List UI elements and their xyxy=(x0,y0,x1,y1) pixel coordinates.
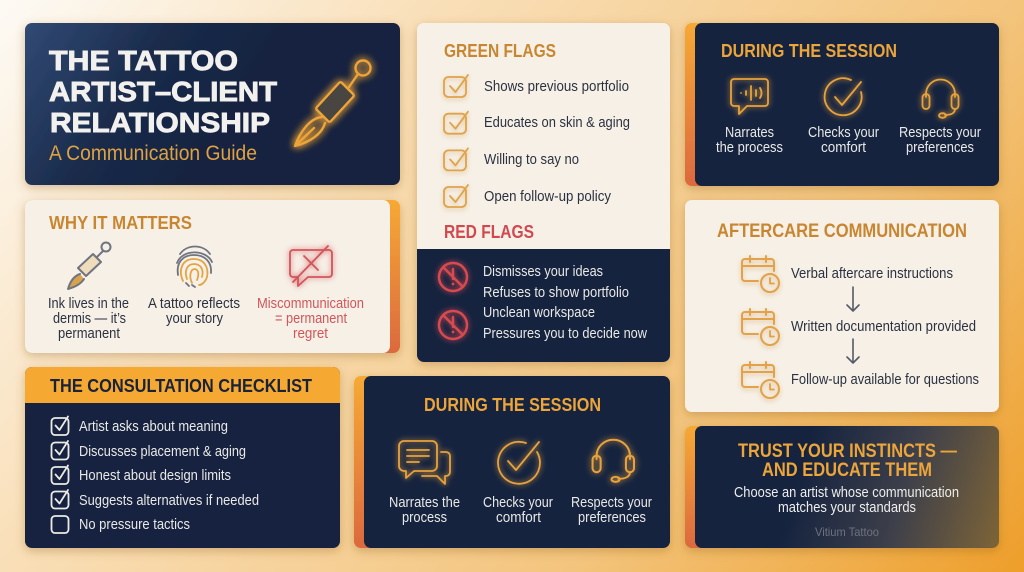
text: narrates xyxy=(389,494,460,526)
heading: WHY IT MATTERS xyxy=(49,213,192,233)
text: respects preferences xyxy=(899,124,981,156)
text: body xyxy=(734,484,959,516)
red flags dark area xyxy=(417,249,670,362)
panel: during the session (upper) xyxy=(685,23,999,186)
text: narrates: process xyxy=(402,509,447,526)
aftercare steps xyxy=(791,265,979,388)
subtitle: A Communication Guide xyxy=(49,142,257,165)
arrow: step one to two xyxy=(847,287,859,311)
aftercare steps: Verbal aftercare instructions xyxy=(791,265,953,282)
checklist items: Discusses placement & aging xyxy=(79,443,246,460)
green flag items: Open follow-up policy xyxy=(484,188,611,205)
arrow: step two to three xyxy=(847,339,859,363)
icon: miscommunication bubble xyxy=(290,246,332,286)
heading xyxy=(738,441,957,481)
heading: THE CONSULTATION CHECKLIST xyxy=(50,376,312,396)
icon: fingerprint xyxy=(177,246,212,287)
aftercare steps: Follow-up available for questions xyxy=(791,371,979,388)
text: respects preferences xyxy=(571,494,652,526)
text: respects preferences: preferences xyxy=(578,509,646,526)
aftercare steps: Written documentation provided xyxy=(791,318,976,335)
icon: check circle xyxy=(825,78,862,115)
text: reflects story: your story xyxy=(166,310,223,327)
panel: during the session (lower) xyxy=(354,376,670,548)
green flag items: Willing to say no xyxy=(484,151,579,168)
text: narrates xyxy=(716,124,783,156)
heading: DURING THE SESSION xyxy=(424,395,601,415)
text: miscommunication: = permanent xyxy=(275,310,348,327)
panel: green and red flags xyxy=(417,23,670,362)
text: checks comfort: Checks your xyxy=(483,494,553,511)
icon: check circle xyxy=(498,442,540,484)
text: miscommunication: regret xyxy=(293,325,329,342)
text: reflects story xyxy=(148,295,240,327)
red flag items: Pressures you to decide now xyxy=(483,325,647,342)
checklist items: Artist asks about meaning xyxy=(79,418,228,435)
text: narrates: the process xyxy=(716,139,783,156)
text: credit: Vitium Tattoo xyxy=(815,525,879,539)
red flag items xyxy=(483,263,647,342)
heading: green flags: GREEN FLAGS xyxy=(444,41,556,61)
text: checks comfort xyxy=(808,124,879,156)
heading: DURING THE SESSION xyxy=(721,41,897,61)
green flag items: Educates on skin & aging xyxy=(484,114,630,131)
text: respects preferences: Respects your xyxy=(899,124,981,141)
green flag items xyxy=(444,75,630,207)
red flag items: Refuses to show portfolio xyxy=(483,284,629,301)
text: checks comfort: comfort xyxy=(496,509,542,526)
text: respects preferences: Respects your xyxy=(571,494,652,511)
icon: tattoo machine xyxy=(295,60,370,146)
text: checks comfort xyxy=(483,494,553,526)
panel: aftercare communication xyxy=(685,200,999,412)
red flag items: Dismisses your ideas xyxy=(483,263,603,280)
text: narrates: Narrates xyxy=(725,124,774,141)
text: respects preferences: preferences xyxy=(906,139,974,156)
red flag items: Unclean workspace xyxy=(483,304,595,321)
green flag items: Shows previous portfolio xyxy=(484,78,629,95)
heading: TRUST YOUR INSTINCTS — xyxy=(738,441,957,462)
title: THE TATTOO xyxy=(49,45,238,76)
panel: title xyxy=(25,23,400,185)
title: RELATIONSHIP xyxy=(50,107,270,138)
text: ink lives: Ink lives in the xyxy=(48,295,129,312)
icon: tattoo machine grey xyxy=(68,242,110,289)
checklist items: No pressure tactics xyxy=(79,516,190,533)
panel: consultation checklist xyxy=(25,367,340,548)
text: ink lives xyxy=(48,295,129,342)
checklist items: Suggests alternatives if needed xyxy=(79,492,259,509)
heading: red flags: RED FLAGS xyxy=(444,222,534,242)
title xyxy=(49,45,277,138)
icon: chat bubbles xyxy=(399,441,450,484)
icon: headset xyxy=(593,440,634,482)
text: checks comfort: Checks your xyxy=(808,124,879,141)
heading: AND EDUCATE THEM xyxy=(762,460,932,481)
icon: speech bubble with sound xyxy=(731,79,768,114)
text: miscommunication xyxy=(257,295,364,342)
text: ink lives: dermis — it’s xyxy=(53,310,126,327)
header band xyxy=(25,367,340,403)
text: body: Choose an artist whose communication xyxy=(734,484,959,501)
icons: calendar clocks xyxy=(742,256,779,398)
checklist items xyxy=(52,416,259,533)
heading: AFTERCARE COMMUNICATION xyxy=(717,221,967,242)
text: miscommunication: Miscommunication xyxy=(257,295,364,312)
panel: why it matters xyxy=(25,200,400,353)
text: checks comfort: comfort xyxy=(821,139,867,156)
text: narrates: Narrates the xyxy=(389,494,460,511)
panel: trust your instincts xyxy=(685,426,999,548)
text: body: matches your standards xyxy=(778,499,916,516)
icons: warning signs xyxy=(439,263,467,339)
icon: headset xyxy=(922,80,958,118)
title: ARTIST–CLIENT xyxy=(49,76,277,107)
text: reflects story: A tattoo reflects xyxy=(148,295,240,312)
text: ink lives: permanent xyxy=(58,325,121,342)
checklist items: Honest about design limits xyxy=(79,467,231,484)
